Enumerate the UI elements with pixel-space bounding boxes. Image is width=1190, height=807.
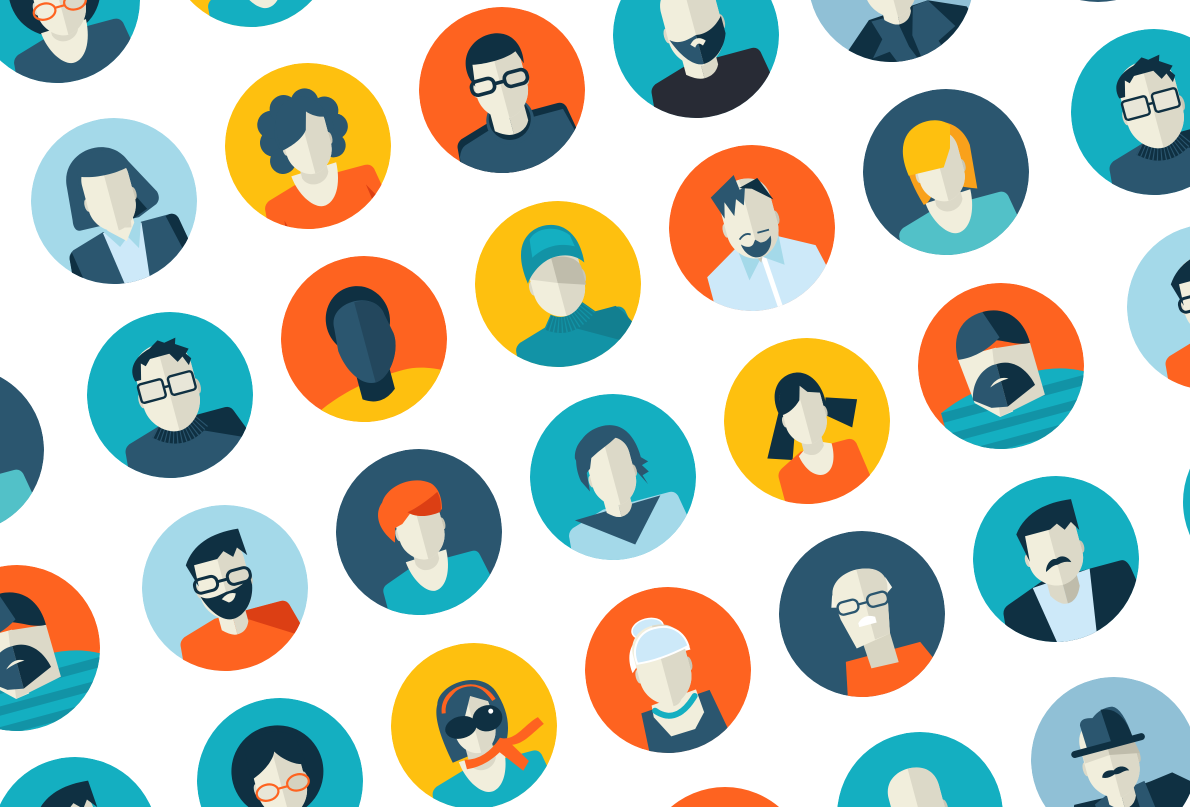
avatar: man with big glasses, dark turtleneck: [87, 312, 253, 478]
avatar: woman with bob and suit: [31, 118, 197, 284]
avatar: grandmother with bun and beads: [585, 587, 751, 753]
avatar: man with moustache and jacket: [973, 476, 1139, 642]
avatar: woman with red glasses, bottom: [197, 698, 363, 807]
avatar: bottom orange partial: [642, 787, 808, 807]
avatar: left edge navy: [0, 376, 44, 524]
avatar: man with big glasses, turtleneck, right: [1071, 29, 1190, 195]
avatar: bearded man with glasses, orange tee: [142, 505, 308, 671]
avatar: bearded man, striped shirt, right: [918, 283, 1084, 449]
avatar: spiky hair man in shirt: [669, 145, 835, 311]
avatar: man with dark glasses, navy tee: [419, 7, 585, 173]
avatar: man in dark jacket, top: [810, 0, 972, 62]
avatar: light blue partial right: [1127, 226, 1190, 388]
avatar: woman with red glasses, top left: [0, 0, 140, 83]
avatar: woman with sunglasses and scarf: [391, 643, 557, 807]
avatar: bald old man with glasses: [779, 531, 945, 697]
avatar: dark skinned person, yellow shirt: [281, 256, 447, 422]
avatar: blonde woman: [863, 89, 1029, 255]
avatar: top navy sliver: [1015, 0, 1181, 2]
avatar: girl with pigtails: [724, 338, 890, 504]
avatar: man with hat and moustache: [1031, 677, 1190, 807]
avatar: right edge teal partial: [1183, 419, 1190, 585]
avatar: bald man, bottom: [837, 732, 1002, 807]
avatar: bearded man, striped shirt, left: [0, 565, 100, 731]
avatar: man with side hair, light blue top: [530, 394, 696, 560]
avatar: man in cap and turtleneck: [475, 201, 641, 367]
avatar: bottom left teal partial: [0, 757, 151, 807]
avatar: woman with curly hair: [225, 63, 391, 229]
avatar: top yellow partial: [190, 0, 312, 27]
avatar: bald man with beard: [613, 0, 779, 118]
avatar: red haired woman: [336, 449, 502, 615]
